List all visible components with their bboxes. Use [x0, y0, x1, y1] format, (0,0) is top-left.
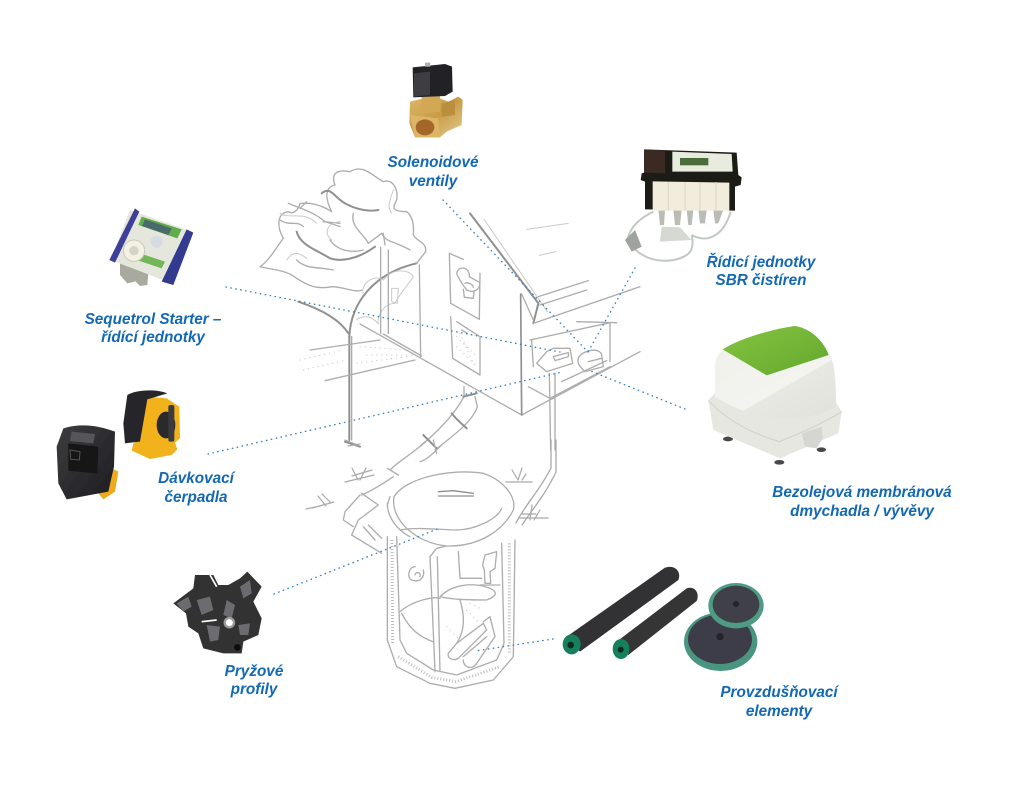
- tank interior: [400, 546, 500, 672]
- hose: [549, 373, 555, 450]
- sketch: grass tufts: [306, 440, 556, 525]
- product: membrane blower: [708, 326, 842, 465]
- label: dosing pumps: Dávkovací: [158, 470, 234, 487]
- label: Sequetrol Starter: řídící jednotky: [101, 329, 206, 346]
- front pump: [57, 425, 118, 499]
- label: rubber profiles: Pryžové: [225, 663, 283, 680]
- shower window: [451, 317, 480, 375]
- toilet window: [449, 253, 480, 319]
- tufts: [306, 440, 548, 520]
- large disc: [684, 612, 757, 671]
- ground: [300, 340, 415, 381]
- tube 2: [613, 588, 698, 659]
- sketch: tank: [343, 440, 515, 688]
- product: Sequetrol Starter controller: [109, 208, 193, 286]
- inlet pipe: [343, 440, 443, 553]
- house drain pipe: [420, 387, 477, 450]
- dotted leader lines: [208, 200, 685, 651]
- product: rubber profiles: [173, 572, 262, 653]
- tube 1: [563, 567, 679, 654]
- lid: [387, 472, 514, 546]
- back pump: [123, 390, 180, 459]
- product: solenoid valve: [409, 63, 463, 137]
- label: membrane blowers: dmychadla / vývěvy: [790, 503, 935, 520]
- hose to tank: [516, 440, 556, 525]
- product: aeration elements: [563, 567, 764, 671]
- control boxes: [537, 348, 603, 372]
- product: dosing pumps: [57, 390, 180, 499]
- tree: [260, 169, 426, 447]
- small disc: [708, 583, 764, 628]
- label: SBR control units: Řídicí jednotky: [707, 254, 815, 271]
- label: membrane blowers: Bezolejová membránová: [772, 484, 952, 501]
- label: Sequetrol Starter: Sequetrol Starter –: [85, 311, 221, 328]
- label: aeration elements: Provzdušňovací: [720, 684, 838, 701]
- sketch: house and tree: [260, 169, 640, 450]
- house walls: [360, 213, 640, 415]
- label: SBR control units: SBR čistíren: [716, 272, 806, 289]
- label: solenoid valves: Solenoidové: [388, 154, 478, 171]
- label: rubber profiles: profily: [230, 681, 279, 698]
- label: aeration elements: elementy: [746, 703, 814, 720]
- label: dosing pumps: čerpadla: [165, 489, 228, 506]
- tank shell: [387, 537, 515, 688]
- product: SBR control unit: [625, 149, 742, 261]
- label: solenoid valves: ventily: [409, 173, 459, 190]
